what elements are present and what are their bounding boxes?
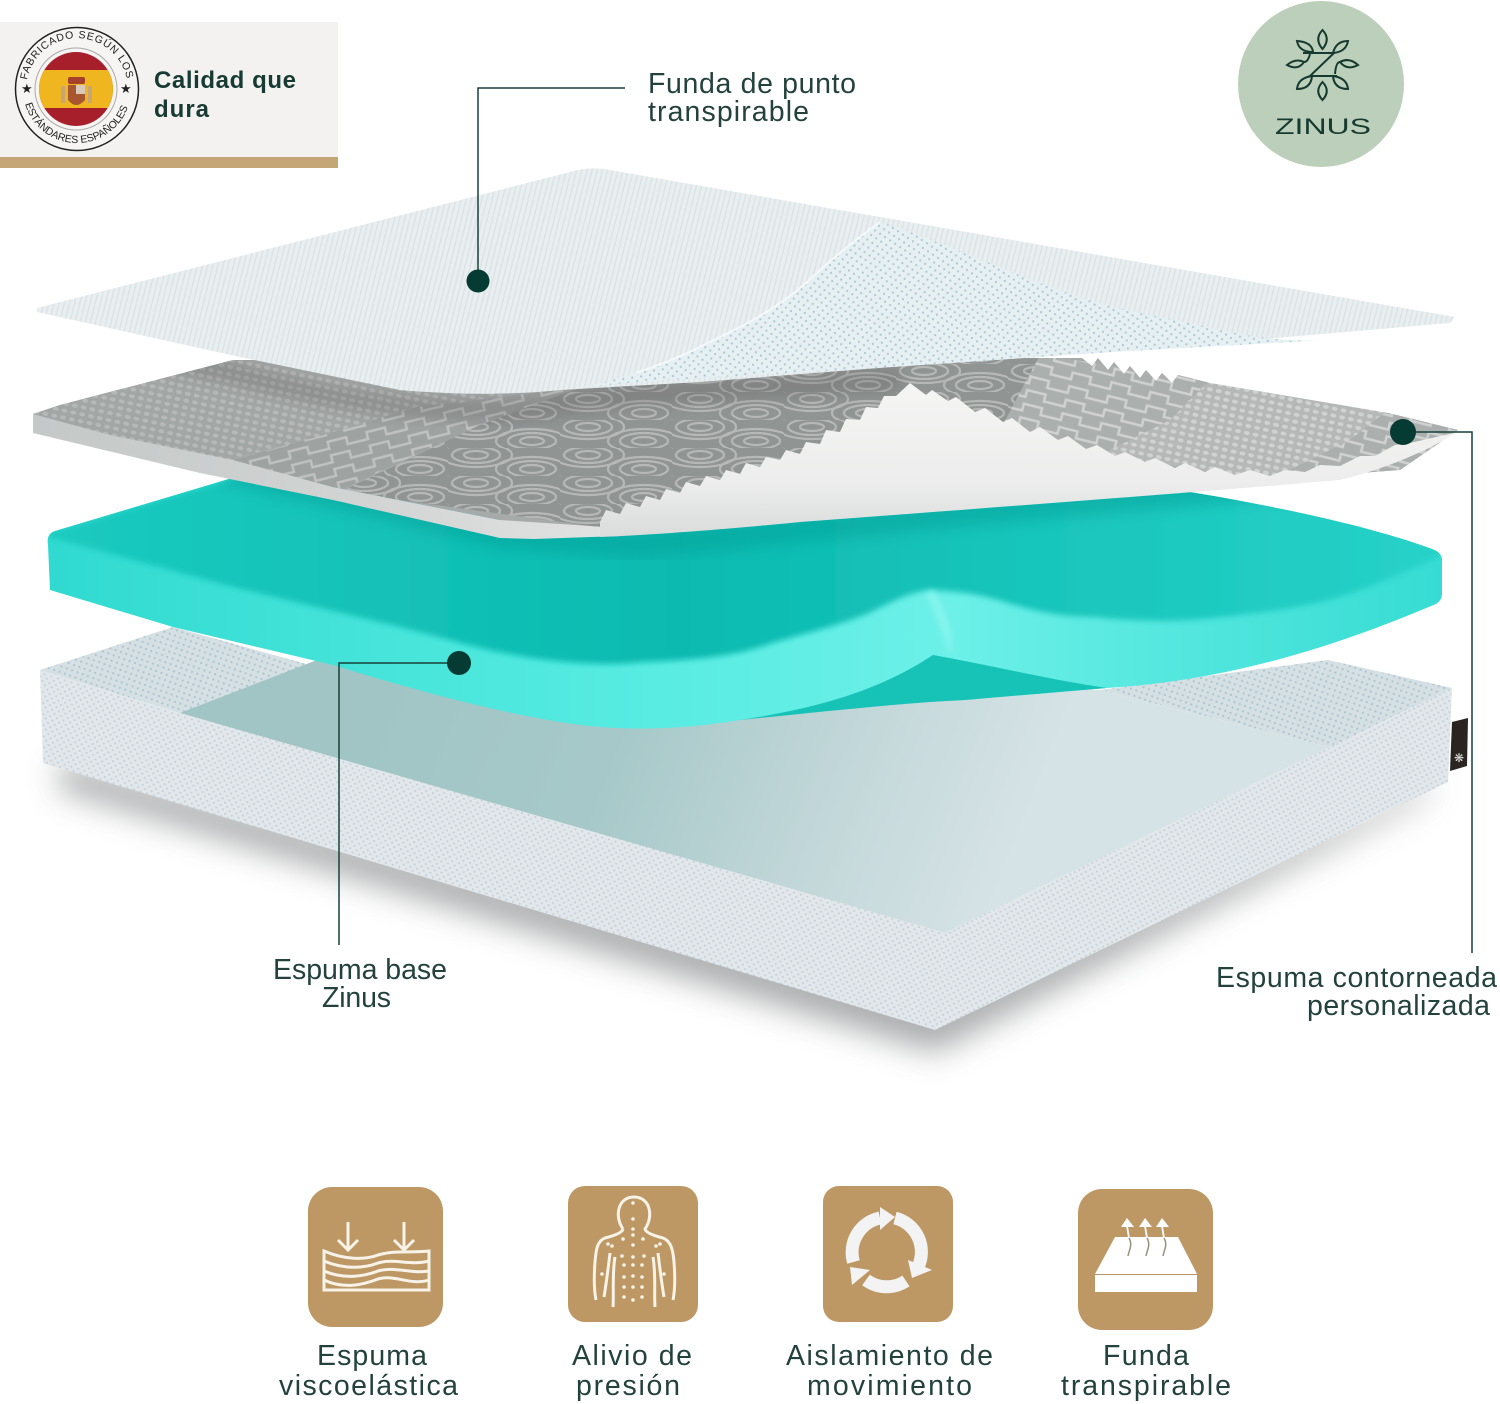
egg crate right zone: [1108, 382, 1384, 476]
logo leaf mark: [1287, 30, 1358, 100]
layer: teal memory foam: [48, 470, 1450, 729]
feature: Espuma viscoelástica: Espuma: [317, 1340, 427, 1372]
feature: Aislamiento de movimiento: movimiento: [807, 1370, 972, 1402]
icon: body with pressure points: [594, 1197, 675, 1307]
feature: Funda transpirable: [1061, 1189, 1231, 1402]
chevron zone right: [1004, 358, 1208, 448]
feature: Alivio de presión: Alivio de: [572, 1340, 692, 1372]
badge text: Calidad que: [154, 67, 296, 94]
seal: Spanish flag stamp: FABRICADO SEGÚN LOS: [20, 31, 134, 80]
callout: Espuma contorneada personalizada: Espuma contorneada: [1216, 962, 1497, 994]
egg crate left zone: [33, 360, 503, 459]
feature: Espuma viscoelástica: [279, 1187, 458, 1402]
ground shadow: [60, 760, 1440, 1052]
feature: Alivio de presión: [568, 1186, 698, 1402]
mattress exploded diagram: [0, 168, 1468, 1052]
layer: knit cover: [37, 168, 1455, 394]
ring zone centre: [340, 350, 1050, 530]
layer: base cover: [40, 627, 1468, 1030]
callout: Espuma base Zinus: [273, 651, 471, 1014]
cover peeled underside: [561, 222, 1327, 390]
logo: Zinus: ZINUS: [1275, 114, 1371, 139]
badge: made in Spain quality: [0, 22, 338, 168]
icon: circular arrows: [850, 1207, 932, 1287]
feature: Espuma viscoelástica: viscoelástica: [279, 1370, 458, 1402]
callout: Espuma base Zinus: Espuma base: [273, 954, 447, 986]
layer: contoured grey foam: [33, 358, 1458, 539]
feature: Aislamiento de movimiento: Aislamiento de: [786, 1340, 993, 1372]
seal: Spanish flag stamp: ★: [120, 81, 132, 96]
feature: Funda transpirable: Funda: [1103, 1340, 1189, 1372]
seal: Spanish flag stamp: ESTÁNDARES ESPAÑOLES: [25, 102, 128, 144]
callout: Funda de punto transpirable: [466, 68, 856, 292]
feature: Alivio de presión: presión: [576, 1370, 680, 1402]
callout: Espuma contorneada personalizada: personalizada: [1307, 990, 1490, 1022]
chevron zone left: [234, 390, 564, 489]
seal: Spanish flag stamp: [14, 26, 140, 152]
callout: Espuma base Zinus: Zinus: [322, 982, 391, 1014]
seal: Spanish flag stamp: ★: [21, 81, 33, 96]
grey top surface: [33, 358, 1458, 527]
chevron zone far right: [1294, 412, 1458, 472]
icon: mattress with rising air arrows: [1095, 1218, 1197, 1292]
callout: Funda de punto transpirable: transpirable: [648, 96, 809, 128]
care label: [1450, 718, 1468, 771]
feature: Funda transpirable: transpirable: [1061, 1370, 1231, 1402]
grey side band: [33, 414, 620, 539]
care label: ❋: [1454, 751, 1464, 765]
callout: Espuma contorneada personalizada: [1216, 419, 1497, 1022]
callout: Funda de punto transpirable: Funda de punto: [648, 68, 856, 100]
logo: Zinus: [1238, 1, 1404, 167]
folded underside: [600, 383, 1458, 537]
icon: foam layers with arrows: [324, 1222, 429, 1290]
feature: Aislamiento de movimiento: [786, 1186, 993, 1402]
badge text: dura: [154, 96, 210, 123]
